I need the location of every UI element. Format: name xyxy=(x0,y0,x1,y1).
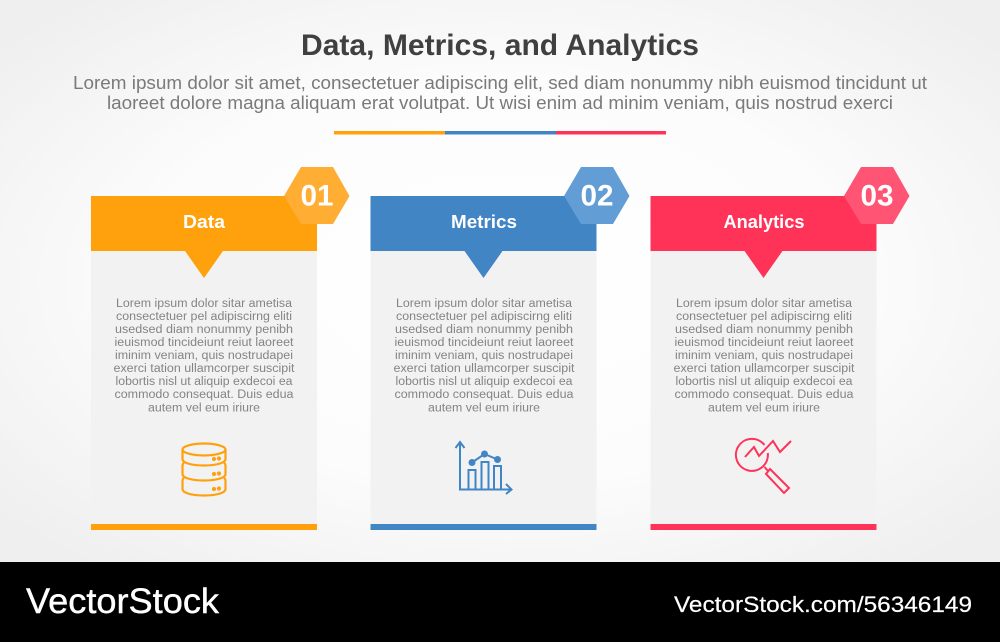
body text: iminim veniam, quis nostrudapei xyxy=(675,350,853,362)
body text: exerci tation ullamcorper suscipit xyxy=(394,363,575,375)
bottom bar xyxy=(370,524,596,530)
body text: lobortis nisl ut aliquip exdecoi ea xyxy=(116,376,293,388)
bottom bar xyxy=(91,524,317,530)
body text: usedsed diam nonummy penibh xyxy=(115,324,293,336)
card body xyxy=(650,251,876,524)
body text: ieuismod tincideiunt reiut laoreet xyxy=(114,337,294,349)
subtitle text xyxy=(73,72,927,113)
tricolor divider xyxy=(334,131,666,134)
body text xyxy=(394,298,575,414)
body text: commodo consequat. Duis edua xyxy=(394,389,574,401)
card body xyxy=(91,251,317,524)
body text: autem vel eum iriure xyxy=(148,402,260,414)
body text: autem vel eum iriure xyxy=(708,402,820,414)
icon: magnifier with trend line xyxy=(736,439,791,493)
panel: data xyxy=(91,167,350,530)
body text: lobortis nisl ut aliquip exdecoi ea xyxy=(396,376,573,388)
body text: exerci tation ullamcorper suscipit xyxy=(674,363,855,375)
body text: lobortis nisl ut aliquip exdecoi ea xyxy=(676,376,853,388)
footer logo: VectorStock xyxy=(26,582,220,621)
body text xyxy=(674,298,855,414)
heading: Data xyxy=(183,212,226,232)
body text: commodo consequat. Duis edua xyxy=(114,389,294,401)
panel: analytics xyxy=(650,167,910,530)
body text: iminim veniam, quis nostrudapei xyxy=(395,350,573,362)
body text xyxy=(114,298,295,414)
body text: usedsed diam nonummy penibh xyxy=(395,324,573,336)
subtitle text: laoreet dolore magna aliquam erat volutpat. Ut wisi enim ad minim veniam, quis nostrud exerci xyxy=(107,92,893,113)
body text: commodo consequat. Duis edua xyxy=(674,389,854,401)
body text: iminim veniam, quis nostrudapei xyxy=(115,350,293,362)
number badge: 01 xyxy=(300,180,334,212)
panel: metrics xyxy=(370,167,630,530)
heading: Metrics xyxy=(451,212,517,232)
number badge xyxy=(564,167,630,224)
body text: Lorem ipsum dolor sitar ametisa xyxy=(676,298,853,310)
number badge xyxy=(284,167,350,224)
header banner xyxy=(650,196,876,278)
body text: consectetuer pel adipiscirng eliti xyxy=(116,311,292,323)
body text: usedsed diam nonummy penibh xyxy=(675,324,853,336)
header banner xyxy=(370,196,596,278)
body text: Lorem ipsum dolor sitar ametisa xyxy=(116,298,293,310)
body text: consectetuer pel adipiscirng eliti xyxy=(676,311,852,323)
footer bar xyxy=(0,562,1000,642)
body text: ieuismod tincideiunt reiut laoreet xyxy=(674,337,854,349)
header banner xyxy=(91,196,317,278)
bottom bar xyxy=(650,524,876,530)
body text: consectetuer pel adipiscirng eliti xyxy=(396,311,572,323)
subtitle text: Lorem ipsum dolor sit amet, consectetuer adipiscing elit, sed diam nonummy nibh euismod tincidunt ut xyxy=(73,72,927,93)
number badge xyxy=(844,167,910,224)
number badge: 02 xyxy=(580,180,614,212)
icon: bar chart xyxy=(456,442,512,494)
icon: database xyxy=(182,444,226,496)
body text: autem vel eum iriure xyxy=(428,402,540,414)
heading: Analytics xyxy=(724,212,804,232)
body text: Lorem ipsum dolor sitar ametisa xyxy=(396,298,573,310)
body text: exerci tation ullamcorper suscipit xyxy=(114,363,295,375)
footer image id: VectorStock.com/56346149 xyxy=(674,592,972,617)
body text: ieuismod tincideiunt reiut laoreet xyxy=(394,337,574,349)
card body xyxy=(370,251,596,524)
title: Data, Metrics, and Analytics xyxy=(301,29,699,62)
number badge: 03 xyxy=(860,180,894,212)
